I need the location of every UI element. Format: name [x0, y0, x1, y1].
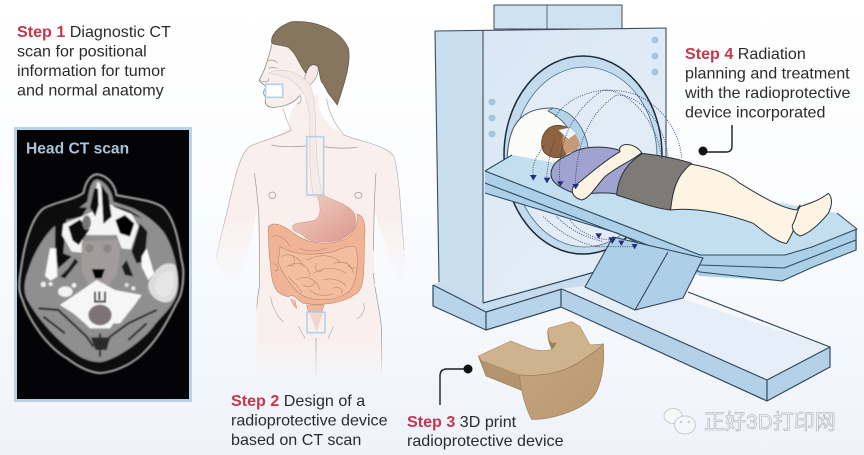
step 1 caption: information for tumor [17, 62, 166, 80]
device notch [548, 328, 557, 349]
gantry ring [504, 56, 662, 254]
step 1 caption: scan for positional [17, 42, 147, 60]
step 3 leader line [440, 369, 466, 405]
dark pockets [55, 217, 72, 268]
CT axial head slice [19, 174, 183, 373]
patient arm [572, 145, 642, 200]
watermark [664, 408, 836, 434]
watermark text: 正好3D打印网 [704, 411, 836, 434]
nasopharynx [82, 239, 120, 285]
icon: WeChat logo [664, 408, 696, 434]
device top surface [478, 322, 603, 375]
step 3 caption: radioprotective device [407, 432, 564, 450]
hair [271, 21, 349, 105]
step 2 caption: radioprotective device [231, 412, 388, 430]
rectum shape [309, 313, 323, 332]
panel: treatment machine [433, 5, 857, 401]
body outlines [216, 45, 404, 378]
CT scan label: Head CT scan [26, 140, 129, 158]
mandible [45, 248, 57, 281]
step 4 caption: planning and treatment [685, 64, 850, 82]
panel: head CT scan [16, 128, 190, 400]
3D printed radioprotective device [478, 322, 604, 419]
colon and intestines [268, 214, 365, 312]
oesophagus [268, 70, 323, 198]
table pedestal [585, 237, 703, 310]
stomach [292, 195, 356, 242]
patient shorts [616, 153, 692, 210]
patient table [485, 155, 857, 255]
torso and arms [219, 94, 403, 354]
device region boxes [266, 84, 325, 333]
head bore [507, 108, 589, 190]
skull base [60, 280, 142, 328]
patient hair [542, 125, 570, 158]
step 1 caption: Step 1 Diagnostic CT [17, 23, 171, 41]
radiation beams [533, 90, 682, 247]
patient [530, 90, 831, 249]
step 2 caption: based on CT scan [231, 431, 361, 449]
patient legs [670, 163, 800, 243]
gantry body [435, 28, 666, 303]
enhancing gland [148, 263, 178, 302]
body silhouette with faded limbs [216, 40, 405, 380]
device front face [519, 344, 604, 419]
step 4 caption: with the radioprotective [684, 84, 851, 102]
device left side face [478, 356, 523, 391]
step 4 caption: Step 4 Radiation [685, 45, 806, 63]
facial bones and sinuses [62, 182, 138, 253]
face mask [558, 127, 577, 139]
muscle planes [38, 308, 157, 357]
step 3 caption: Step 3 3D print [407, 413, 516, 431]
step 1 caption: and normal anatomy [17, 82, 165, 100]
step 4 leader line [704, 125, 732, 152]
head and neck [259, 40, 315, 107]
gantry base [433, 272, 595, 312]
gantry indicator dots [488, 36, 658, 138]
panel: human body anatomy [216, 21, 405, 380]
step 2 caption: Step 2 Design of a [231, 392, 365, 410]
patient shirt [551, 147, 642, 195]
patient face [562, 130, 580, 154]
machine tower top [494, 5, 622, 29]
step 4 caption: device incorporated [685, 104, 825, 122]
floor plate [562, 272, 830, 380]
beam arrowheads [530, 175, 638, 249]
